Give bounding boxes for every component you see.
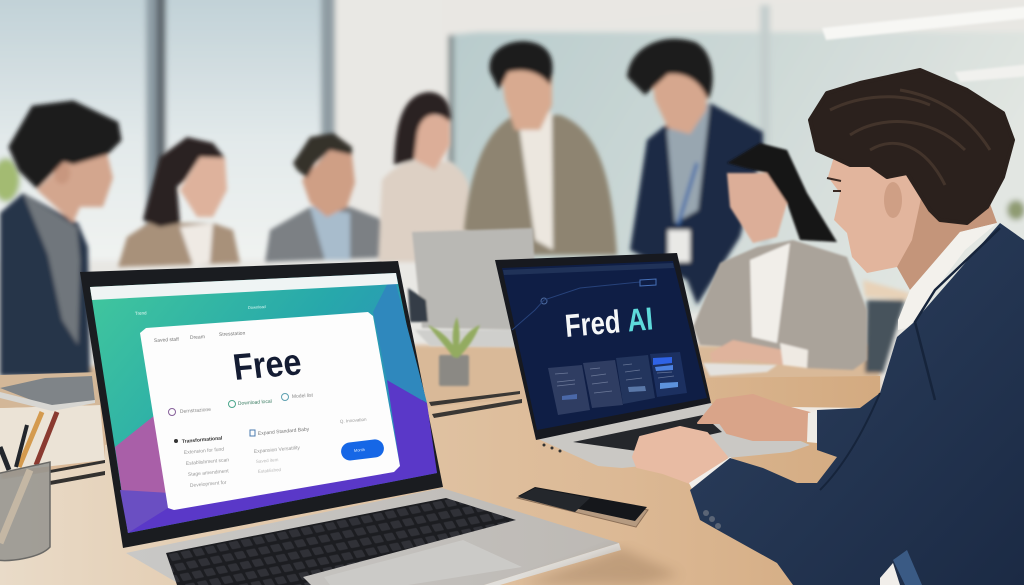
person: woman cream blouse <box>378 92 471 262</box>
potted plant <box>428 317 480 386</box>
laptop: Free: Model list <box>292 392 314 400</box>
feature list: Transformational <box>182 435 223 445</box>
ceiling lights <box>822 6 1024 82</box>
laptop: Free: Stresstation <box>219 331 246 338</box>
blue button: Month <box>354 447 365 453</box>
laptop: Free: Saved item <box>256 457 279 464</box>
blue button <box>340 438 385 461</box>
room background <box>0 0 1024 390</box>
foreground man: front hand on keyboard <box>633 427 736 489</box>
foreground man: neck and face <box>827 140 997 317</box>
pricing tiles <box>548 352 687 415</box>
app bar <box>503 263 674 275</box>
laptop: Free: Established <box>258 467 282 474</box>
person: woman grey blazer <box>693 143 867 376</box>
pencil holder <box>0 412 57 560</box>
laptop: Free: Download <box>248 304 266 310</box>
browser nav: Trend <box>135 310 147 316</box>
person: man navy blazer with lanyard <box>627 39 763 305</box>
laptop: Free: Extension for fund <box>184 446 225 456</box>
person: man grey suit <box>265 133 397 262</box>
person: woman beige jacket <box>118 137 240 267</box>
table shadow under laptop <box>520 548 680 585</box>
foreground man: shirt collar <box>898 223 997 330</box>
foreground man: navy suit <box>690 223 1024 585</box>
Free title: Free <box>231 342 304 388</box>
Fred AI title: Fred AI <box>564 302 655 345</box>
laptop: Free: Stage amendment <box>188 468 229 478</box>
feature chips <box>168 408 176 416</box>
laptop: Free: Development for <box>190 480 227 489</box>
laptop: Free: Dream <box>190 334 205 341</box>
laptop: Fred AI <box>495 253 810 468</box>
laptop: Free: Dernstrazione <box>180 407 211 415</box>
laptop: Free: Expand Standard Baby <box>258 426 310 437</box>
front table <box>0 372 880 585</box>
screen gradient shapes <box>115 415 176 533</box>
card tabs: Saved staff <box>154 337 180 344</box>
person: man left <box>0 102 120 376</box>
foreground man: back hand on keyboard <box>698 395 820 443</box>
back table <box>0 280 910 480</box>
laptop: Free: Download local <box>238 399 272 407</box>
action column: Q. Innovation <box>340 417 367 424</box>
pricing card <box>140 312 400 510</box>
laptop: Free: Establishment scan <box>186 457 230 467</box>
background laptop <box>408 228 570 348</box>
laptop: Free <box>80 261 621 585</box>
person: man tan blazer <box>464 41 617 255</box>
middle column <box>250 430 255 436</box>
laptop: Free: Expansion Versatility <box>254 445 301 455</box>
phone <box>517 487 648 527</box>
foreground man: hair <box>810 70 1013 223</box>
